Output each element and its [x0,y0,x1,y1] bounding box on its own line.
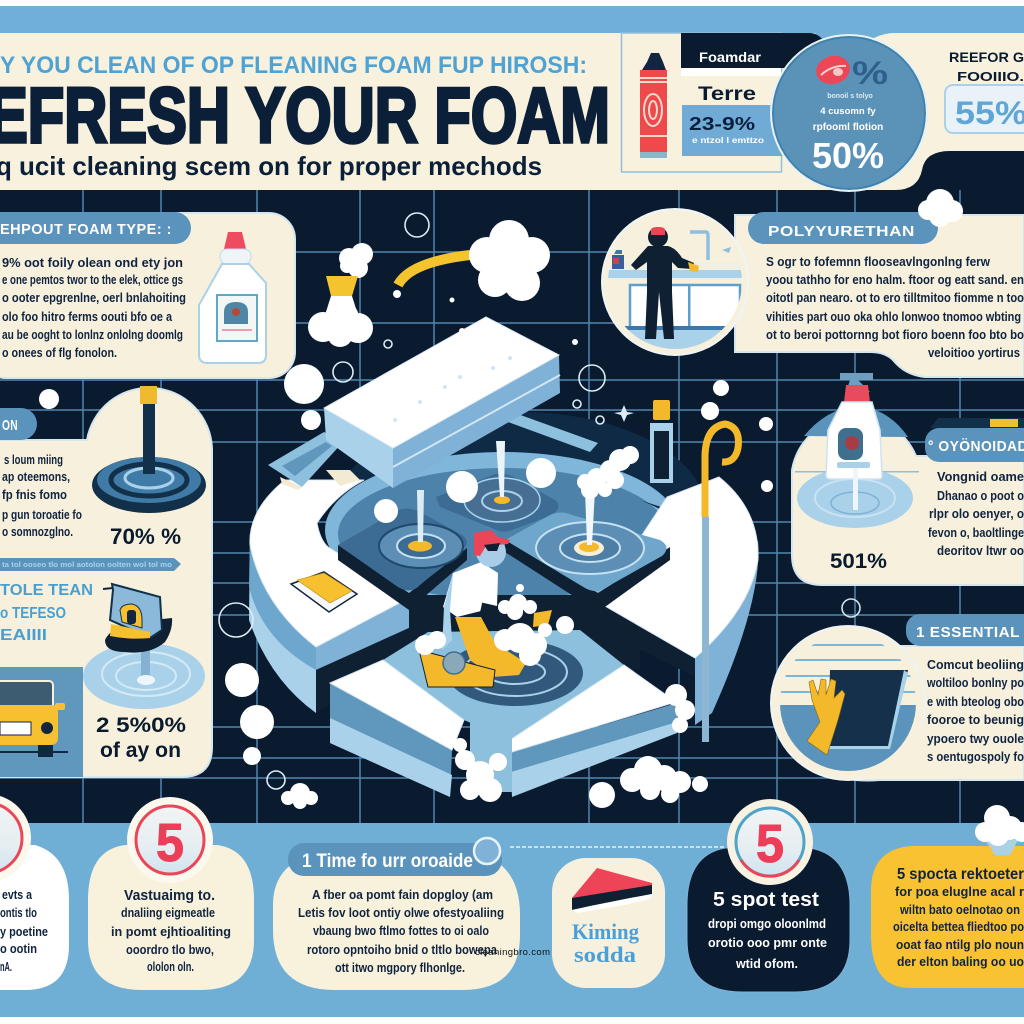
blue heading text: o TEFESO [0,605,66,622]
central isometric foam illustration [39,213,773,809]
body text: orotio ooo pmr onte [708,936,827,950]
body text [2,453,82,539]
outer ring: left segment [249,480,409,713]
divider strip: ta tol ooseo tlo mol aotolon oolten wol tol mo [2,562,172,569]
outer ring: right segment [598,477,758,725]
number badge: 5 [156,813,184,873]
stat: 50%: 501% [830,550,887,573]
stat: 25% of area: of ay on [100,739,181,762]
inner plates [338,441,670,612]
body text: au be ooght to lonlnz onlolng doomlg [2,328,183,342]
stat box: e ntzol l emttzo [692,136,764,145]
icon: cleaner bottle [199,232,266,363]
number badge [127,797,213,883]
card 1 [0,794,69,990]
circle callout 50%: rpfooml flotion [813,122,883,133]
circle callout 50%: 50% [812,135,884,176]
body text: e one pemtos twor to the elek, ottice gs [2,273,183,287]
body text: ontis tlo [0,906,37,920]
heading pill [906,614,1024,646]
label: sodda [574,942,636,967]
body text: 9% oot foily olean ond ety jon [2,256,183,270]
body text: Letis fov loot ontiy olwe ofestyoaliing [298,906,504,920]
icon: worker at sink [612,227,731,339]
blue heading text [0,582,93,644]
heading pill: ON [2,417,18,434]
mini bottle [650,400,673,483]
watermark: cleaningbro.com [475,947,550,958]
body text [298,888,504,975]
icon: sponge wedge [572,868,652,913]
icon: red foam [813,52,853,88]
front right [510,703,677,797]
body text: rotoro opntoiho bnid o tltlo bowepa [307,943,498,957]
header panel [0,33,1024,190]
body text: s loum miing [4,453,63,467]
floating bubbles [393,290,578,345]
heading pill [0,212,191,244]
body text [766,255,1024,360]
label: Kiming [572,919,639,944]
body text: o ootin [0,942,37,956]
heading pill: 1 ESSENTIAL [916,624,1020,641]
foam bottom center [453,738,507,802]
side stat top right: REEFOR G [949,49,1024,65]
body text: vbaung bwo ftlmo fottes to oi oalo [313,924,489,938]
worker figure [415,530,574,687]
body text: nA. [0,960,12,974]
body text: Vongnid oame [937,470,1024,484]
body text: dropi omgo oloonlmd [708,917,826,931]
dark tiled background [0,140,1024,824]
body text [0,888,48,974]
icon: rod [930,418,1024,428]
main title: EFRESH YOUR FOAM [0,71,610,159]
icon: yellow hook pole [702,424,738,742]
circle callout 50% [771,35,927,191]
foam bottom left [281,783,318,809]
stat: 25% of area: 2 5%0% [96,714,186,737]
icon: spray can [640,53,667,158]
back plate [436,441,558,532]
body text: wtid ofom. [735,957,798,971]
body text: for poa eluglne acal r [895,885,1024,899]
heading pill [925,428,1024,462]
body text: Comcut beoliing [927,658,1024,672]
body text: y poetine [0,925,48,939]
panel: essential [770,614,1024,780]
body text: ott itwo mgpory flhonlge. [335,961,465,975]
number badge [727,799,813,885]
tab label [681,33,828,76]
body text: ap oteemons, [2,470,70,484]
illustration circle [600,209,750,358]
large foam cloud [469,220,550,301]
body text: ololon oln. [147,960,194,974]
panel: foam type [0,212,295,378]
body text [893,885,1024,969]
panel: overspray [792,373,1024,585]
panel: left tall panel [0,386,212,777]
stat box [682,105,792,156]
body text: ooordro tlo bwo, [126,943,214,957]
stat label: Terre [698,84,756,105]
right plate [505,490,670,612]
stat: 70%: 70% % [110,524,181,549]
body text: in pomt ejhtioaliting [111,925,231,939]
panel: polyurethane [600,209,1024,377]
circle callout 50%: 4 cusomn fy [820,106,876,117]
basin back [325,412,706,670]
body text: p gun toroatie fo [2,508,82,522]
dashed connector [510,846,725,848]
body text: A fber oa pomt fain dopgloy (am [312,888,493,902]
card 4 baking soda [552,858,665,988]
card 2 [88,797,254,990]
blue heading text: EAIIII [0,627,47,644]
left plate [338,490,467,610]
subtitle: q ucit cleaning scem on for proper mechods [0,151,542,181]
sparkle [614,405,634,422]
top blue band [0,6,1024,36]
blue heading text: TOLE TEAN [0,582,93,599]
foam bubbles [39,364,773,808]
body text [708,917,827,971]
body text: o somnozglno. [2,525,73,539]
floor [383,630,624,740]
body text: olo foo hitro ferms oouti bfo oe a [2,310,173,324]
heading pill [288,843,502,876]
yellow pipe [398,255,470,285]
top foam block [268,317,560,490]
label: 5 spot test [713,889,819,911]
top foam and pipe [308,220,578,347]
tab label: Foamdar [699,49,762,65]
card 3 [273,838,520,990]
side stat top right [945,49,1024,133]
body text [2,256,186,360]
bubble ring [474,838,500,864]
icon: small bubble [842,599,860,617]
heading pill [748,212,938,244]
divider strip [0,558,181,571]
stat: 25% of area [96,714,186,762]
outer ring: front segments [330,630,677,797]
foam bottom right [620,684,708,803]
body text: dnaliing eigmeatle [121,906,215,920]
body text: evts a [2,888,33,902]
foam cone with cap [308,276,373,347]
side stat top right: 55% [955,95,1024,131]
body text: fooroe to beunig [927,713,1024,727]
card 6 yellow tip [871,805,1024,988]
icon: yellow sponge [291,572,357,612]
label [572,919,639,967]
card 5 spot test [687,799,850,992]
body text: o onees of flg fonolon. [2,346,117,360]
circle callout 50%: % [852,55,888,91]
icon: yellow car [0,667,83,777]
body text [111,887,231,974]
body text [926,658,1024,764]
ring bubbles [219,213,605,789]
body text: S ogr to fofemnn flooseavlngonlng ferw [766,255,990,269]
number badge [0,794,31,882]
body text: Vastuaimg to. [124,887,215,904]
body text: fp fnis fomo [2,488,67,502]
illustration: spray bottle over water [795,373,919,528]
header kicker: Y YOU CLEAN OF OP FLEANING FOAM FUP HIROSH: [0,52,587,79]
foam plume right [577,446,639,499]
front left [330,683,452,797]
stat box: 23-9% [689,114,755,134]
number badge: 5 [756,814,784,874]
icon: steam cleaner on disk [83,584,205,709]
heading pill: EHPOUT FOAM TYPE: : [0,221,172,238]
icon: rod in ripple [92,386,206,513]
heading pill [0,408,37,440]
body text: der elton baling oo uo [897,955,1024,969]
icon: foam cloud top right [918,189,963,227]
heading pill: 1 Time fo urr oroaide [302,851,473,872]
body text: o ooter epgrenlne, oerl bnlahoiting [2,291,186,305]
side stat top right: FOOIIIO. [957,69,1024,84]
icon: foam cloud [975,805,1024,855]
body text [928,470,1024,558]
small foam cloud [339,243,373,278]
bottom band [0,823,1024,1017]
heading pill: POLYYURETHAN [768,223,915,240]
circle callout 50%: bonoil s tolyo [827,93,873,100]
illustration: glove and mat [780,644,916,771]
product stat box [622,33,828,172]
